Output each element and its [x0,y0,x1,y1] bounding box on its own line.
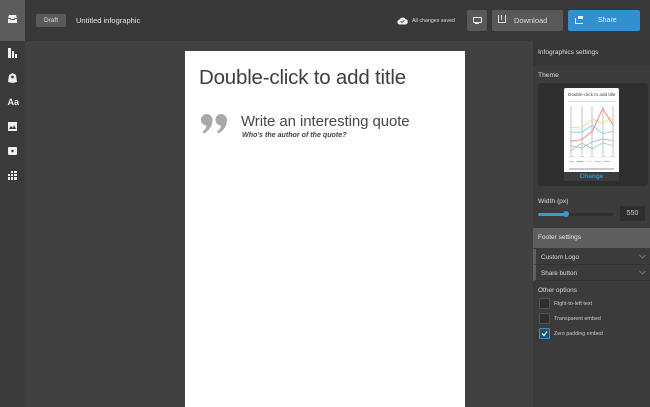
top bar [0,0,650,41]
width label: Width (px) [538,198,568,205]
icon: map [8,73,17,83]
share button [568,10,640,31]
thumbnail chart [568,101,615,170]
option: transparent [539,313,601,324]
document name: Untitled infographic [76,16,140,25]
icon: text: Aa [8,97,19,107]
save status [397,18,455,24]
theme label: Theme [538,72,559,79]
custom logo row: Custom Logo [541,254,579,261]
footer settings header: Footer settings [538,234,581,241]
icon: grid [8,171,17,180]
quote author: Who's the author of the quote? [242,131,347,139]
other options heading: Other options [538,287,577,294]
share button: Share [598,17,617,24]
settings panel [533,41,650,407]
option: zero padding [539,328,603,339]
change button [564,172,619,181]
save status: All changes saved [412,18,455,24]
canvas page [185,51,465,407]
chevron [639,254,646,258]
title: Double-click to add title [199,66,406,89]
quote text: Write an interesting quote [241,113,410,130]
option: right-to-left [539,298,592,309]
icon: chart [8,48,17,58]
width slider [538,211,613,217]
settings heading [533,41,650,66]
theme thumbnail [564,88,619,172]
thumbnail title: Double-click to add title [568,92,616,97]
download button: Download [514,16,547,25]
custom logo row [533,249,650,265]
option: right-to-left: Right-to-left text [554,301,592,307]
footer settings header [533,228,650,248]
download button [492,10,563,31]
share button row: Share button [541,270,577,277]
settings heading: Infographics settings [538,49,598,56]
preview button [467,10,487,31]
draft badge [36,14,66,27]
left icon sidebar [0,0,25,407]
change button: Change [580,173,603,180]
icon: image [8,122,17,131]
width value: 550 [627,210,638,217]
draft badge: Draft [44,17,58,24]
icon: video [8,147,17,155]
icon: quote mark [200,114,227,134]
share button row [533,265,650,281]
active tab [0,0,25,41]
chevron [639,270,646,274]
theme preview [538,83,648,186]
option: zero padding: Zero padding embed [554,331,603,337]
option: transparent: Transparent embed [554,316,601,322]
width value [620,206,645,221]
